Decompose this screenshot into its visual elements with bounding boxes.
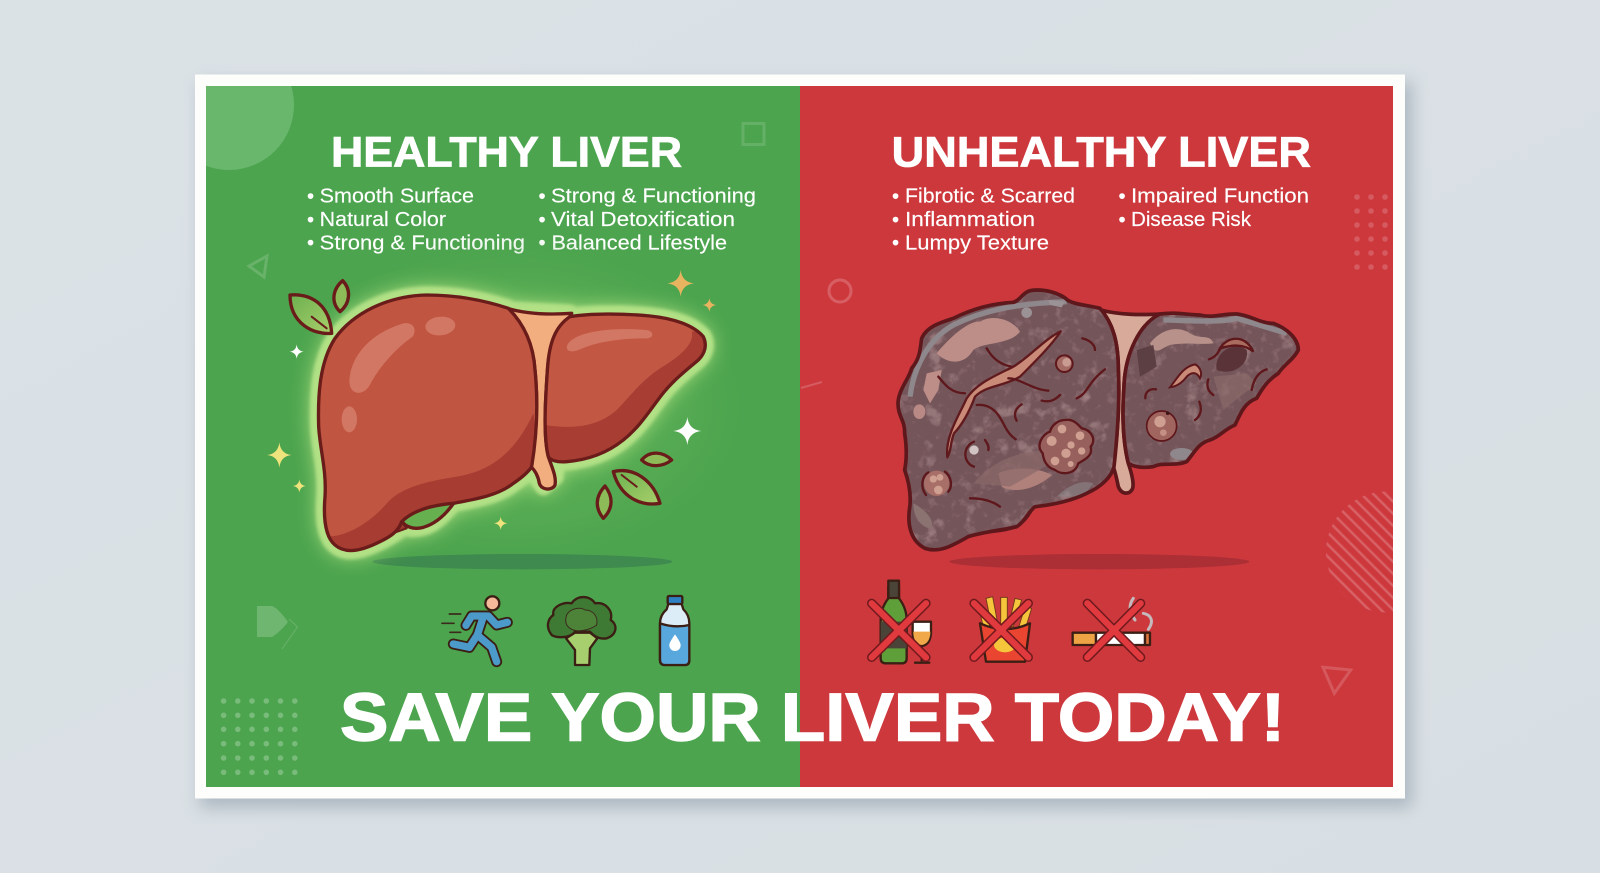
healthy lifestyle icons: [442, 596, 689, 665]
decorative dot grid: [1354, 194, 1388, 270]
scar crack: [938, 331, 1105, 457]
unhealthy traits list: •: [892, 185, 899, 208]
decorative dash: [801, 382, 822, 388]
healthy traits list: •: [538, 208, 546, 232]
icon: crossed fries: [974, 597, 1032, 662]
icon: water bottle: [660, 596, 689, 665]
right lobe: [1120, 307, 1303, 470]
decorative dot grid: [221, 698, 298, 775]
unhealthy traits list: Impaired Function: [1131, 186, 1309, 208]
card shadow: [200, 82, 1412, 808]
healthy traits list: •: [538, 185, 546, 208]
decorative ghost arrow: [257, 606, 298, 649]
glow outline: [318, 295, 705, 551]
ground shadow: [949, 554, 1249, 569]
right lobe: [543, 314, 713, 470]
liver illustration: unhealthy: [890, 283, 1303, 569]
unhealthy traits list: Fibrotic & Scarred: [905, 186, 1075, 208]
healthy traits list: [307, 185, 756, 254]
unhealthy traits list: •: [1118, 185, 1126, 208]
healthy traits list: Balanced Lifestyle: [552, 232, 727, 254]
healthy traits list: •: [307, 185, 314, 208]
ground shadow: [372, 554, 672, 569]
healthy traits list: •: [307, 232, 314, 254]
unhealthy traits list: •: [892, 232, 899, 254]
unhealthy traits list: [892, 185, 1309, 254]
decorative striped circle: [1326, 492, 1393, 612]
unhealthy traits list: •: [892, 208, 899, 232]
healthy traits list: Strong & Functioning: [551, 186, 756, 208]
icon: runner: [442, 596, 507, 662]
lower lobe flap: [970, 507, 1033, 533]
decorative square: [743, 124, 764, 144]
poster card: [195, 74, 1405, 798]
sparkles: [267, 270, 716, 530]
healthy traits list: •: [538, 232, 546, 254]
gallbladder: [388, 503, 454, 535]
panel: healthy liver: [206, 86, 800, 787]
icon: crossed cigarette: [1073, 598, 1151, 657]
ligament: [507, 308, 572, 489]
leaves top left: [290, 281, 349, 333]
heading: healthy liver: HEALTHY LIVER: [331, 129, 682, 177]
glow halo: [318, 295, 705, 551]
healthy traits list: Smooth Surface: [320, 186, 474, 208]
decorative circle: [206, 86, 294, 170]
healthy traits list: •: [307, 208, 314, 232]
unhealthy habit icons: [872, 581, 1151, 663]
leaves bottom right: [597, 453, 672, 518]
decorative triangle: [1323, 667, 1351, 693]
healthy traits list: Natural Color: [320, 209, 446, 231]
liver illustration: healthy: [268, 238, 724, 570]
icon: broccoli: [548, 597, 615, 665]
decorative triangle: [249, 256, 267, 277]
healthy traits list: Vital Detoxification: [551, 209, 735, 231]
panel: unhealthy liver: [800, 86, 1447, 787]
healthy traits list: Strong & Functioning: [320, 232, 525, 254]
decorative ring: [829, 280, 851, 302]
ligament: [1101, 310, 1162, 493]
unhealthy traits list: Lumpy Texture: [905, 232, 1049, 254]
left lobe: [318, 295, 547, 570]
unhealthy traits list: •: [1118, 208, 1126, 232]
unhealthy traits list: Inflammation: [905, 209, 1035, 231]
left lobe: [890, 283, 1123, 557]
heading: unhealthy liver: UNHEALTHY LIVER: [892, 129, 1311, 177]
unhealthy traits list: Disease Risk: [1131, 209, 1252, 231]
nodules: [922, 355, 1093, 496]
icon: crossed wine bottle: [872, 581, 931, 663]
slogan: SAVE YOUR LIVER TODAY!: [340, 680, 1285, 756]
